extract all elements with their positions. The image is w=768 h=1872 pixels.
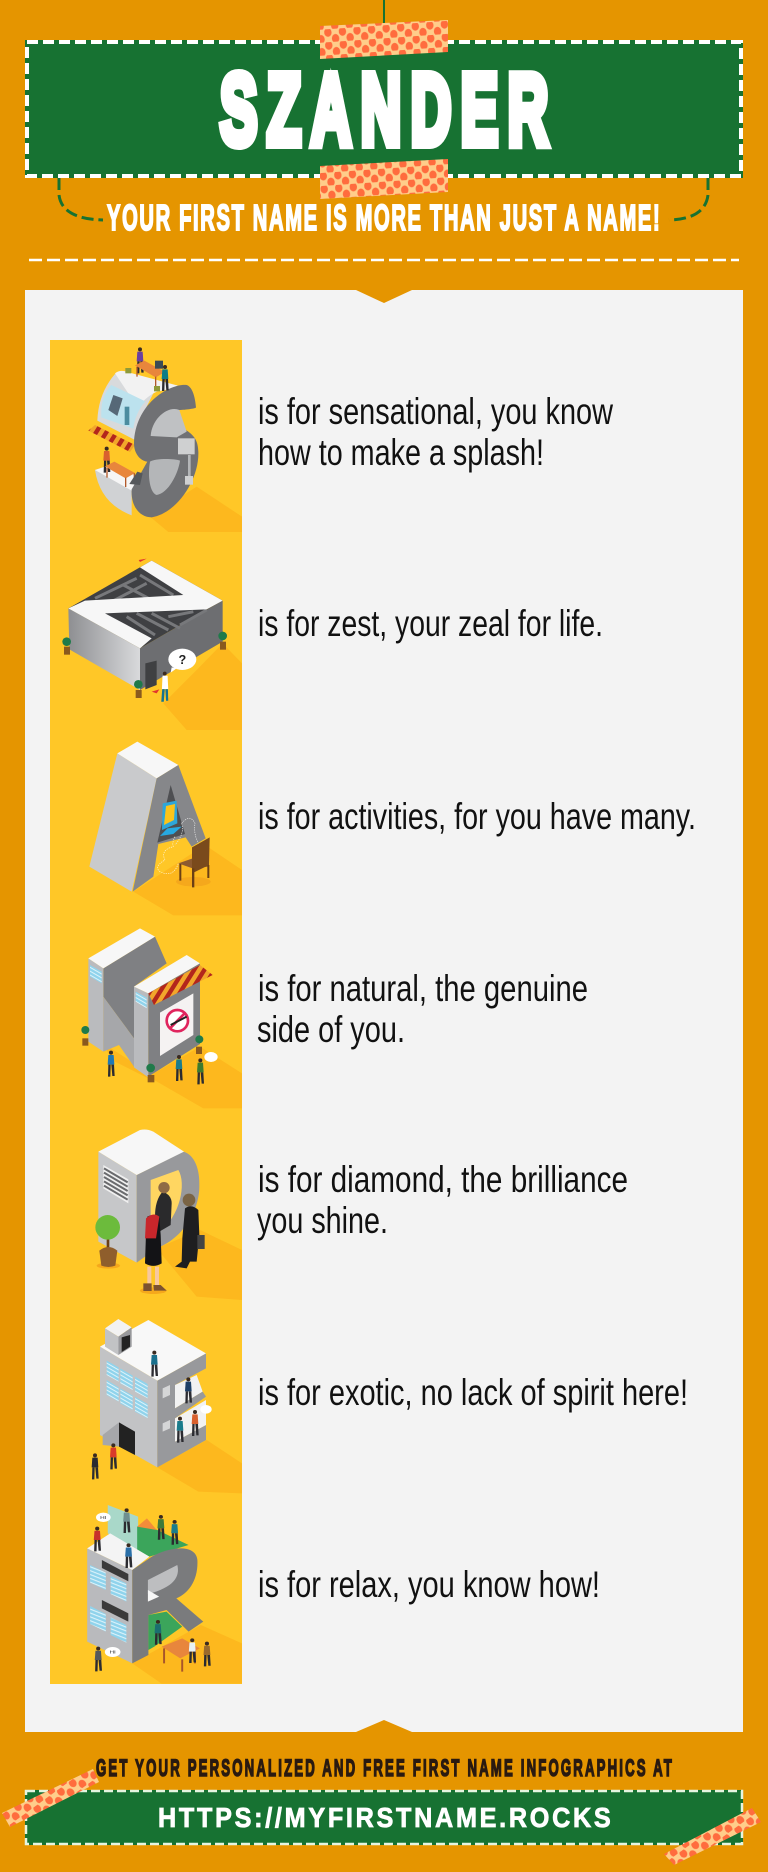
speech bubble labels: HI	[109, 1650, 116, 1655]
icon: letter S	[88, 347, 242, 532]
question mark: ?	[178, 653, 186, 667]
tape: footer right	[664, 1808, 761, 1865]
text: D	[257, 1159, 628, 1241]
icon: letter E	[92, 1319, 242, 1493]
icon: letter A	[89, 742, 242, 915]
panel: yellow letter column	[50, 340, 242, 1684]
text: Z: is for zest, your zeal for life.	[258, 603, 603, 644]
dashed divider	[29, 259, 739, 261]
icon: letter R	[87, 1505, 242, 1684]
tagline: YOUR FIRST NAME IS MORE THAN JUST A NAME!	[107, 199, 660, 239]
url banner	[25, 1790, 743, 1845]
text: S: is for sensational, you know	[258, 391, 613, 432]
tape: bottom	[320, 159, 448, 199]
text: D: is for diamond, the brilliance	[258, 1159, 628, 1200]
icon: letter Z	[62, 559, 242, 730]
tape: footer left	[2, 1769, 99, 1827]
text: S: how to make a splash!	[258, 432, 544, 473]
title banner	[25, 40, 743, 178]
text: N: side of you.	[257, 1009, 405, 1050]
text: S	[258, 391, 613, 473]
speech bubble labels: HI	[100, 1516, 107, 1521]
text: D: you shine.	[257, 1200, 388, 1241]
text: N: is for natural, the genuine	[258, 968, 588, 1009]
hanging line	[383, 0, 385, 26]
text: N	[257, 968, 588, 1050]
icon: letter D	[95, 1129, 242, 1300]
tape: top	[320, 20, 448, 59]
panel: content	[25, 290, 743, 1732]
speech bubble labels	[100, 1516, 116, 1655]
text: R: is for relax, you know how!	[258, 1564, 600, 1605]
icon: letter N	[81, 928, 242, 1108]
connector: right	[669, 178, 708, 220]
url: HTTPS://MYFIRSTNAME.ROCKS	[158, 1802, 611, 1833]
title: SZANDER	[220, 55, 548, 166]
connector: left	[59, 178, 103, 220]
footer call to action: GET YOUR PERSONALIZED AND FREE FIRST NAME INFOGRAPHICS AT	[96, 1755, 672, 1782]
